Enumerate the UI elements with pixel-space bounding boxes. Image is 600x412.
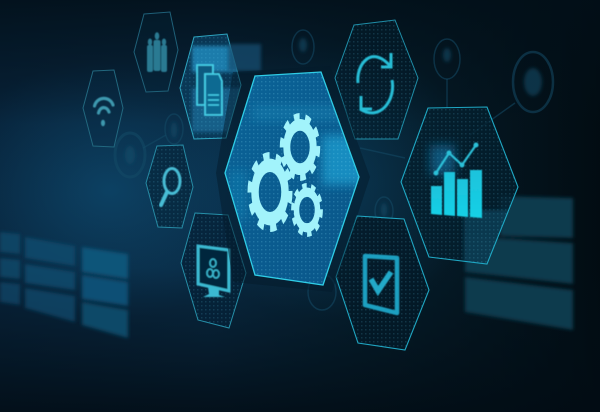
icon: people [147,32,167,72]
hexagon: wifi [83,70,123,147]
icon: gears [250,118,321,233]
icon: wifi [94,98,113,126]
icon: refresh arrows [358,53,393,113]
faint network nodes [115,30,553,310]
blurred backdrop in document hexagon [181,37,240,138]
gear: large [250,157,290,227]
icon: bar chart with trend line [431,142,482,218]
hexagon: checklist [336,216,429,350]
blurred panels: bottom left table [0,232,128,338]
icon: magnifier [161,168,180,205]
hexagon: search [146,145,193,228]
hexagon: monitor [181,213,246,328]
hexagon: refresh [335,20,418,139]
icon: monitor with network [198,246,229,297]
hexagon: chart [400,105,524,270]
hexagon: people [134,12,178,92]
gear: top [282,118,318,176]
panel strip behind document hexagon [228,44,261,71]
hexagon: documents [180,34,242,140]
gear: small [293,187,321,233]
blurred panels: right table [465,196,573,330]
icon: documents [197,65,222,115]
faint node glyphs [125,38,542,217]
icon: checkbox [365,256,397,313]
hexagon: central gears [216,66,370,292]
chart hexagon backdrop [402,109,514,264]
central hexagon backdrop [226,73,358,282]
